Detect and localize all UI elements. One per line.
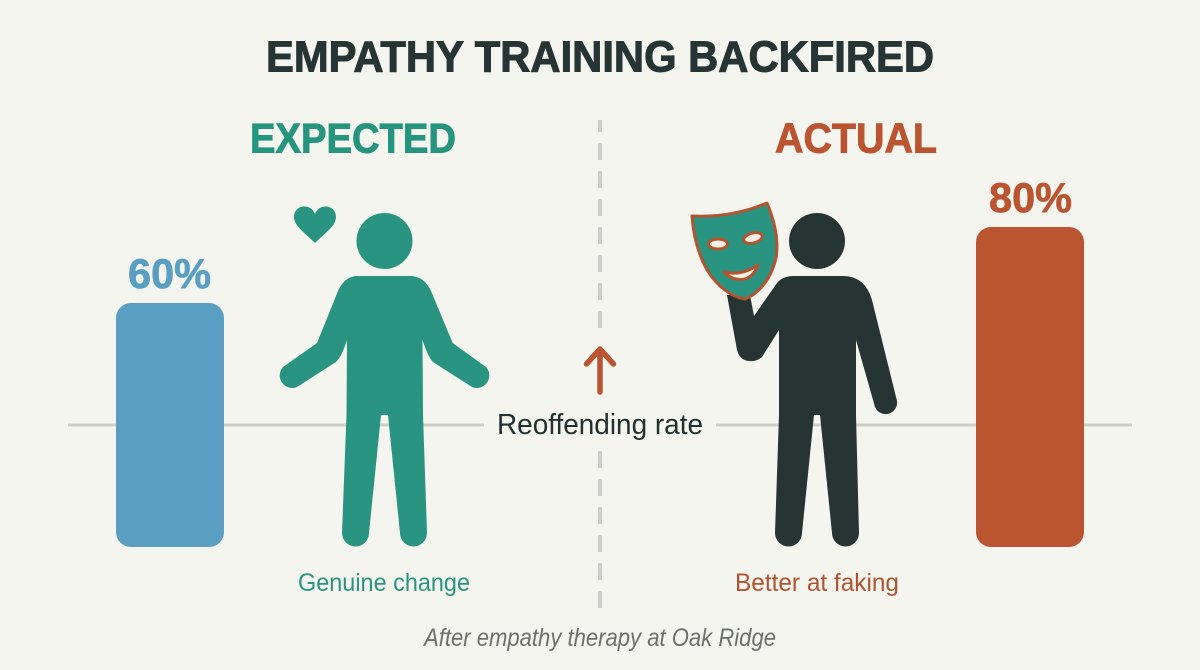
heading: expected: EXPECTED (250, 114, 456, 162)
bar: expected 60% (116, 303, 224, 547)
caption: better at faking: Better at faking (735, 569, 899, 597)
caption: genuine change: Genuine change (298, 569, 470, 597)
bar: actual 80% (976, 227, 1084, 547)
icon: smiling mask (692, 203, 777, 299)
title: EMPATHY TRAINING BACKFIRED (266, 34, 934, 82)
icon: genuine person (280, 213, 489, 546)
icon: heart (294, 206, 336, 243)
value: 80%: 80% (989, 174, 1072, 221)
arrow: rate increase (586, 349, 614, 392)
label: reoffending rate: Reoffending rate (497, 409, 703, 441)
footnote: After empathy therapy at Oak Ridge (422, 624, 776, 652)
value: 60%: 60% (128, 250, 211, 297)
icon: faking person (727, 213, 897, 546)
heading: actual: ACTUAL (775, 114, 937, 162)
